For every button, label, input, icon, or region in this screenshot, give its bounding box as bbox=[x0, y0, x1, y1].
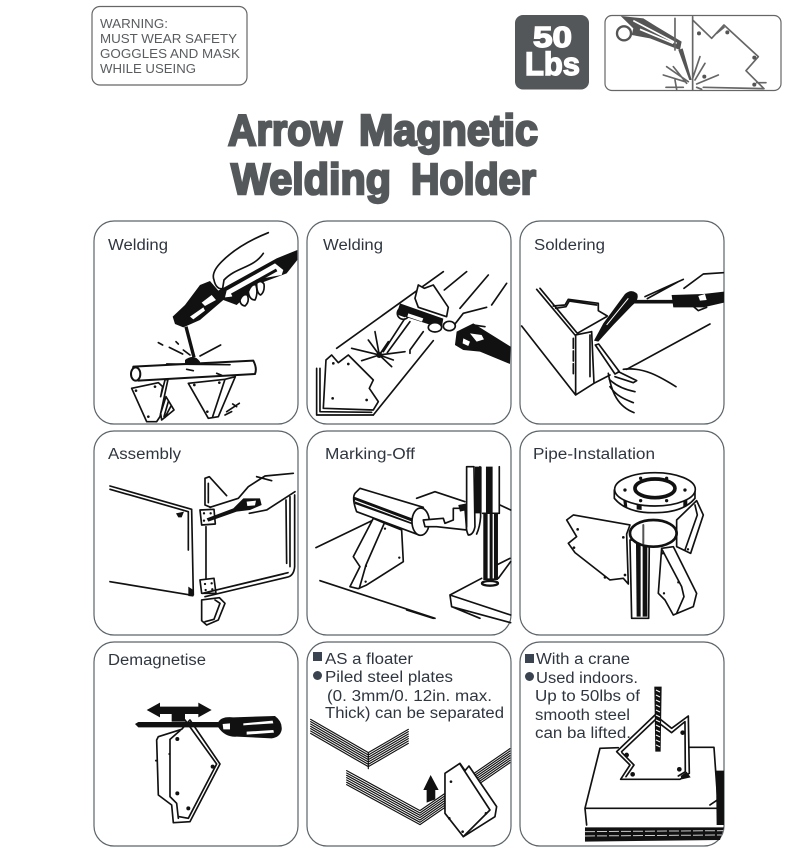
illustration: magnet lifting steel with crane bbox=[585, 687, 724, 842]
title bbox=[228, 106, 538, 204]
label: demagnetise: Demagnetise bbox=[108, 652, 206, 669]
badge: 50 Lbs: Lbs bbox=[525, 46, 580, 82]
illustration: welding a plate held by magnet bbox=[317, 272, 511, 415]
panel: with a crane bbox=[520, 642, 724, 846]
illustration: pipe and flange with magnets bbox=[567, 473, 703, 618]
warning box bbox=[92, 6, 247, 85]
text: crane notes: Up to 50lbs of bbox=[535, 688, 641, 705]
panel: marking-off bbox=[307, 431, 511, 635]
title: Magnetic bbox=[359, 106, 538, 155]
panel: demagnetise bbox=[94, 642, 298, 846]
title: Holder bbox=[411, 155, 536, 204]
illustration: demagnetising with a screwdriver bbox=[135, 703, 282, 823]
panel: soldering bbox=[520, 221, 724, 424]
text: crane notes bbox=[525, 651, 641, 742]
text: floater notes: (0. 3mm/0. 12in. max. bbox=[327, 688, 492, 705]
text: floater notes: Thick) can be separated bbox=[325, 705, 504, 722]
illustration: soldering a corner bbox=[522, 273, 724, 413]
label: assembly: Assembly bbox=[108, 446, 181, 463]
panel: welding diagram icon bbox=[605, 16, 781, 90]
title: Welding bbox=[231, 155, 391, 204]
text: floater notes: AS a floater bbox=[325, 651, 413, 668]
panel: welding pipe bbox=[94, 221, 298, 424]
badge: 50 Lbs: 50 bbox=[533, 22, 572, 54]
text: crane notes: Used indoors. bbox=[536, 670, 638, 687]
illustration: marking-off tool bbox=[316, 467, 511, 623]
label: pipe-installation: Pipe-Installation bbox=[533, 446, 655, 463]
text: floater notes bbox=[313, 651, 504, 722]
text: crane notes: smooth steel bbox=[535, 707, 630, 724]
panel: pipe-installation bbox=[520, 431, 724, 635]
text: crane notes: can ba lifted. bbox=[535, 725, 631, 742]
badge: 50 Lbs bbox=[515, 15, 589, 90]
text: crane notes: With a crane bbox=[536, 651, 630, 668]
label: soldering: Soldering bbox=[534, 237, 605, 254]
illustration: piled steel plates with magnet bbox=[311, 719, 510, 837]
warning box: WARNING: bbox=[100, 16, 168, 31]
warning box: WHILE USEING bbox=[100, 61, 196, 76]
panel: as a floater bbox=[307, 642, 511, 846]
label: marking-off: Marking-Off bbox=[325, 446, 416, 463]
label: welding: Welding bbox=[108, 237, 168, 254]
illustration: assembling a frame bbox=[110, 473, 295, 625]
label: welding: Welding bbox=[323, 237, 383, 254]
warning box: MUST WEAR SAFETY bbox=[100, 31, 237, 46]
text: floater notes: Piled steel plates bbox=[325, 669, 453, 686]
title: Arrow bbox=[228, 106, 343, 155]
illustration: welding a pipe held by magnets bbox=[131, 233, 297, 422]
panel: welding plate bbox=[307, 221, 511, 424]
panel: assembly bbox=[94, 431, 298, 635]
warning box: GOGGLES AND MASK bbox=[100, 46, 240, 61]
